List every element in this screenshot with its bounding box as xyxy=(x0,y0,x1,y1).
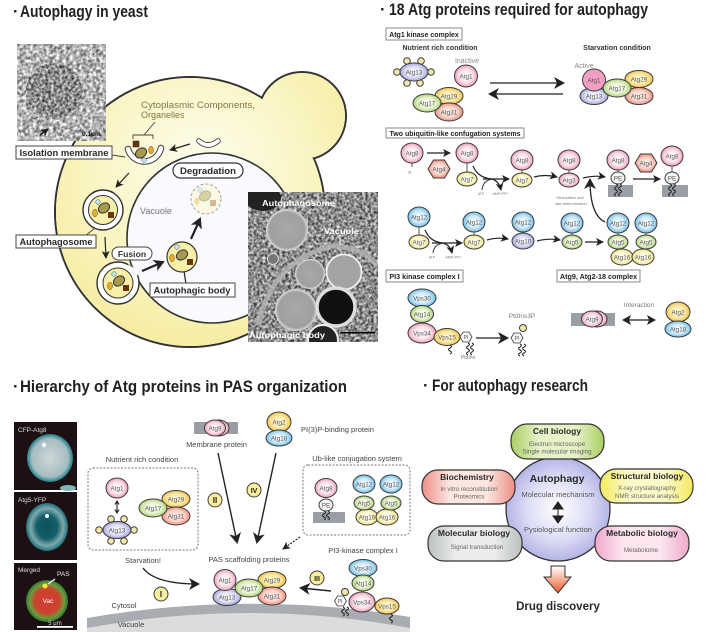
text: Starvation!: Starvation! xyxy=(125,556,161,565)
panel: research fields xyxy=(422,424,693,613)
title: Hierarchy of Atg proteins in PAS organization: Hierarchy of Atg proteins in PAS organization xyxy=(20,378,347,396)
label: PI3 kinase complex I xyxy=(386,270,463,282)
label: Degradation: Degradation xyxy=(180,166,236,176)
dashed box: nutrient rich xyxy=(88,468,198,550)
text: cytoplasmic components: Organelles xyxy=(141,110,185,120)
Atg12 conjugation row: ATP xyxy=(429,256,436,260)
bracket xyxy=(133,122,155,139)
Atg12 conjugation row: Atg5 xyxy=(640,240,653,246)
PAS scaffold complex: Atg17 xyxy=(241,586,258,592)
Atg2 and Atg18 PI3P-binding protein xyxy=(266,412,374,446)
Vps30 Atg14 Vps34 Vps15 stack: PI xyxy=(464,335,468,341)
Atg13 with phosphates: Atg13 xyxy=(406,70,423,76)
heading: starvation condition: Starvation condition xyxy=(583,45,651,52)
pill: Structural biology: NMR structure analysis xyxy=(615,493,679,500)
image: merged: 5 μm xyxy=(48,621,62,627)
thick arrow: fusion to autophagic body xyxy=(142,262,163,271)
title: 18 Atg proteins required for autophagy: · xyxy=(380,1,386,19)
Atg8 conjugation row xyxy=(401,143,688,206)
title: Hierarchy of Atg proteins in PAS organization: · xyxy=(13,378,18,396)
label: Autophagic body: Autophagic body xyxy=(154,286,230,296)
PAS scaffold complex: Atg1 xyxy=(219,578,232,584)
double arrow xyxy=(115,501,119,513)
label: Degradation xyxy=(173,163,243,178)
Atg8 conjugation row: site determination xyxy=(555,201,587,206)
Vps30 Atg14 Vps34 Vps15 stack: PtdIns xyxy=(461,355,476,361)
Atg8-PE: PE xyxy=(322,502,330,510)
label: Fusion: Fusion xyxy=(118,249,146,259)
Atg12 conjugation row: Atg16 xyxy=(635,254,652,262)
Atg12 conjugation row: Atg12 xyxy=(466,220,483,226)
arrow xyxy=(301,588,331,591)
PI3-kinase complex stack: Atg14 xyxy=(355,580,372,588)
electron micrograph: isolation membrane xyxy=(17,44,106,141)
arrow to PAS xyxy=(218,453,237,542)
active complex: Atg29 xyxy=(631,76,648,84)
active complex: Atg13 xyxy=(586,94,603,100)
Atg8 conjugation row: ATP xyxy=(478,192,485,196)
Vps30 Atg14 Vps34 Vps15 stack: Vps15 xyxy=(438,334,456,342)
pill: Cell biology: Cell biology xyxy=(533,426,581,436)
central circle: Autophagy xyxy=(506,457,610,561)
Atg12 conjugation row: Atg16 xyxy=(614,254,631,262)
Atg2 and Atg18: Atg2 xyxy=(672,310,685,316)
Atg1 xyxy=(106,478,128,498)
Vps30 Atg14 Vps34 Vps15 stack xyxy=(408,289,476,361)
Atg13 with phosphates: Atg13 xyxy=(109,528,126,534)
badge I xyxy=(154,587,168,601)
Atg12 conjugation row: Atg7 xyxy=(413,240,426,246)
panel: two ubiquitin-like conjugation systems xyxy=(386,128,688,265)
Atg8 conjugation row: PE xyxy=(668,176,676,182)
badge IV: IV xyxy=(251,488,258,495)
Atg12-Atg5-Atg16: Atg16 xyxy=(379,514,396,522)
active complex: Active xyxy=(574,63,594,70)
pill: Biochemistry: Proteomics xyxy=(454,494,484,500)
badge III xyxy=(310,571,324,585)
arrow xyxy=(476,337,507,339)
thick arrow: to degradation xyxy=(191,219,200,239)
image: Atg5-YFP: Atg5-YFP xyxy=(18,497,46,504)
pill: Structural biology: Structural biology xyxy=(611,471,684,481)
pill: Structural biology xyxy=(600,469,693,503)
feedback arrow xyxy=(590,180,605,222)
vacuole xyxy=(127,153,297,323)
text: cytosol: Cytosol xyxy=(111,601,137,610)
label: Isolation membrane: Isolation membrane xyxy=(20,148,108,158)
active complex: Atg1 xyxy=(588,78,601,84)
text: cytoplasmic components xyxy=(141,100,255,120)
Atg2 and Atg18: Atg18 xyxy=(670,326,687,334)
label: Atg9, Atg2-18 complex: Atg9, Atg2-18 complex xyxy=(560,272,637,281)
arrow to PAS xyxy=(257,453,276,542)
electron micrograph: autophagosome and autophagic bodies: Vacuole xyxy=(324,227,360,236)
Atg1 inactive xyxy=(454,58,479,87)
title: For autophagy research: For autophagy research xyxy=(432,377,588,395)
pill: Biochemistry: In vitro reconstitution xyxy=(440,486,498,493)
label: Isolation membrane xyxy=(16,146,125,159)
Atg12 conjugation row: AMP+PPi xyxy=(445,256,461,260)
electron micrograph: autophagosome and autophagic bodies xyxy=(248,192,378,342)
Atg12 conjugation row: Atg12 xyxy=(638,220,655,228)
Atg9 membrane protein: Membrane protein xyxy=(186,440,247,449)
pill: Biochemistry: Biochemistry xyxy=(440,472,494,482)
PI3-kinase complex stack: PI xyxy=(338,599,342,605)
Atg12 conjugation row: Atg7 xyxy=(468,240,481,246)
pill: Molecular biology: Signal transduction xyxy=(451,544,504,551)
Atg17-29-31: Atg31 xyxy=(168,514,185,520)
panel: PAS organization hierarchy xyxy=(87,412,410,632)
PI3-kinase complex stack: Vps15 xyxy=(378,604,396,610)
image: merged: Vac xyxy=(43,598,54,605)
image: merged xyxy=(14,563,77,630)
active complex: Atg17 xyxy=(609,86,626,92)
heading: nutrient rich condition: Nutrient rich condition xyxy=(402,45,478,52)
Atg8 conjugation row: Atg8 xyxy=(406,150,419,158)
Atg12 conjugation row: Atg12 xyxy=(564,220,581,228)
Atg12-Atg5-Atg16: Atg5 xyxy=(385,500,398,508)
Atg17-29-31: Atg17 xyxy=(145,506,162,512)
Vps30 Atg14 Vps34 Vps15 stack: Vps30 xyxy=(413,296,431,302)
PAS scaffold complex: Atg29 xyxy=(264,578,281,584)
badge III: III xyxy=(314,576,320,583)
Atg8-PE xyxy=(313,478,345,523)
image: merged: Merged xyxy=(18,567,40,574)
degraded cargo xyxy=(191,184,221,214)
pill: Molecular biology xyxy=(428,526,522,561)
pill: Cell biology: Single molecular imaging xyxy=(522,448,592,456)
PtdIns3P xyxy=(509,313,535,356)
curved arrow xyxy=(143,568,198,584)
Atg8 conjugation row: AMP+PPi xyxy=(492,192,508,196)
arrow: down to drug discovery xyxy=(544,566,571,593)
title: Autophagy in yeast: Autophagy in yeast xyxy=(20,3,148,21)
Vps30 Atg14 Vps34 Vps15 stack: Vps34 xyxy=(413,330,431,338)
Atg2 and Atg18 PI3P-binding protein: PI(3)P-binding protein xyxy=(301,425,374,434)
text: cytoplasmic components: Cytoplasmic Components, xyxy=(141,100,255,110)
PAS scaffold complex: Atg13 xyxy=(219,594,236,602)
Atg8 conjugation row: Atg4 xyxy=(640,160,653,168)
Atg12 conjugation row xyxy=(408,207,657,265)
image: CFP-Atg8: CFP-Atg8 xyxy=(18,427,47,434)
electron micrograph: autophagosome and autophagic bodies: Autophagic body xyxy=(249,331,326,340)
pill: Molecular biology: Molecular biology xyxy=(438,528,510,538)
Atg12-Atg5-Atg16: Atg12 xyxy=(383,482,400,488)
badge II: II xyxy=(213,496,217,505)
heading: Ub-like conjugation system: Ub-like conjugation system xyxy=(312,454,402,463)
interaction double arrow: Interaction xyxy=(624,302,655,309)
panel: Atg1 kinase complex xyxy=(386,28,653,121)
Atg8 conjugation row: PE xyxy=(614,176,622,182)
equilibrium arrows xyxy=(490,83,563,94)
PI3-kinase complex stack: Vps34 xyxy=(353,600,371,606)
yeast cell with bud xyxy=(55,72,346,347)
Atg8 conjugation row: Atg7 xyxy=(516,178,529,184)
label: Atg1 kinase complex xyxy=(386,28,462,40)
Atg1 inactive: Inactive xyxy=(455,58,479,65)
text: Vacuole: Vacuole xyxy=(140,206,172,216)
pill: Metabolic biology: Metabolome xyxy=(624,547,659,554)
panel: fluorescence micrographs xyxy=(14,422,77,630)
pill: Biochemistry xyxy=(422,470,515,504)
heading: nutrient rich condition: Nutrient rich condition xyxy=(106,455,178,464)
Atg12-Atg5-Atg16: Atg5 xyxy=(358,500,371,508)
pill: Structural biology: X-ray crystallography xyxy=(618,485,677,492)
autophagic body xyxy=(167,242,197,284)
pill: Metabolic biology xyxy=(595,526,689,561)
Atg8 conjugation row: Atg8 xyxy=(516,158,529,164)
Atg12 conjugation row: Atg10 xyxy=(515,238,532,246)
central circle: Autophagy: Autophagy xyxy=(530,473,585,485)
label: Autophagosome xyxy=(16,228,96,248)
PI3-kinase complex stack xyxy=(334,560,399,623)
label: Autophagosome: Autophagosome xyxy=(20,237,92,247)
Atg12-Atg5-Atg16 xyxy=(353,475,402,525)
Atg17-29-31: Atg29 xyxy=(441,94,458,100)
badge IV xyxy=(247,483,261,497)
pill: Cell biology: Electron microscope xyxy=(529,441,586,448)
label: Fusion xyxy=(112,247,152,260)
PAS scaffold complex xyxy=(213,570,286,606)
Atg12-Atg5-Atg16: Atg12 xyxy=(356,482,373,488)
Atg1 inactive: Atg1 xyxy=(460,74,473,80)
Atg2 and Atg18 PI3P-binding protein: Atg18 xyxy=(271,436,288,442)
text: vacuole: Vacuole xyxy=(118,620,144,629)
membrane band: cytosol and vacuole xyxy=(87,604,410,632)
Atg2 and Atg18 xyxy=(665,302,691,337)
panel: Atg9, Atg2-18 complex xyxy=(557,270,691,337)
badge I: I xyxy=(160,590,162,599)
PtdIns3P: PI xyxy=(515,336,519,342)
image: CFP-Atg8 xyxy=(14,422,77,491)
Atg9 membrane protein xyxy=(186,420,247,449)
PI3-kinase complex stack: Vps30 xyxy=(354,566,372,572)
label: two ubiquitin-like conjugation systems: Two ubiquitin-like confugation systems xyxy=(390,131,521,138)
active complex: Atg31 xyxy=(631,94,648,100)
Atg8 conjugation row: Atg7 xyxy=(461,176,474,184)
Vps30 Atg14 Vps34 Vps15 stack: Atg14 xyxy=(414,312,431,318)
active complex xyxy=(574,63,653,104)
panel: PI3 kinase complex I xyxy=(386,270,535,361)
Atg8 conjugation row: R xyxy=(408,170,412,175)
Atg17-29-31: Atg29 xyxy=(168,496,185,504)
image: merged: PAS xyxy=(57,571,70,578)
arrow xyxy=(105,237,106,258)
Atg8 conjugation row: Atg4 xyxy=(433,166,446,174)
dashed box: Ub-like conjugation xyxy=(303,465,410,535)
Atg8 conjugation row: Stimulation and xyxy=(556,195,584,200)
autophagosome xyxy=(83,190,123,230)
Atg12-Atg5-Atg16: Atg16 xyxy=(359,514,376,522)
Atg17-29-31: Atg31 xyxy=(441,110,458,116)
label: two ubiquitin-like conjugation systems xyxy=(386,128,524,138)
heading: PAS scaffolding proteins: PAS scaffolding proteins xyxy=(208,555,290,564)
isolation membrane cup with cargo xyxy=(128,141,161,162)
central circle: Autophagy: Pysiological function xyxy=(524,525,592,534)
image: Atg5-YFP xyxy=(14,492,77,560)
label: Atg1 kinase complex: Atg1 kinase complex xyxy=(389,32,459,39)
panel: autophagy in yeast diagram xyxy=(16,44,378,355)
Atg13 with phosphates xyxy=(96,516,137,544)
Atg2 and Atg18 PI3P-binding protein: Atg2 xyxy=(273,420,286,426)
Atg13 with phosphates xyxy=(394,58,434,86)
label: PI3 kinase complex I: PI3 kinase complex I xyxy=(389,272,460,281)
central circle: Autophagy: Molecular mechanism xyxy=(522,490,594,499)
Atg17-29-31 xyxy=(413,88,463,121)
electron micrograph: isolation membrane: 0.1μm xyxy=(82,131,101,138)
Atg1: Atg1 xyxy=(111,486,124,492)
arrow xyxy=(116,173,129,187)
arrow xyxy=(170,144,190,150)
title: For autophagy research: · xyxy=(423,377,428,395)
Atg17-29-31: Atg17 xyxy=(419,100,436,108)
pill: Metabolic biology: Metabolic biology xyxy=(606,528,678,538)
label: Autophagic body xyxy=(150,283,235,297)
Atg8 conjugation row: Atg8 xyxy=(612,158,625,164)
Atg8 conjugation row: Atg8 xyxy=(666,154,679,160)
Atg8 conjugation row: Atg3 xyxy=(563,178,576,184)
dashed arrow xyxy=(283,537,300,549)
Atg9 in membrane: Atg9 xyxy=(586,316,599,324)
small membrane crescent xyxy=(199,141,218,145)
fusing autophagosome xyxy=(97,262,139,304)
PtdIns3P: PtdIns3P xyxy=(509,313,535,320)
Atg17-29-31 xyxy=(139,490,190,525)
pill: Cell biology xyxy=(511,424,604,459)
title: 18 Atg proteins required for autophagy: 18 Atg proteins required for autophagy xyxy=(389,1,649,19)
Atg12 conjugation row: Atg12 xyxy=(515,220,532,226)
Atg9 membrane protein: Atg9 xyxy=(209,426,222,432)
heading: PI3-kinase complex I: PI3-kinase complex I xyxy=(328,546,398,555)
Atg12 conjugation row: Atg5 xyxy=(612,240,625,246)
Atg8-PE: Atg8 xyxy=(320,486,333,492)
PAS scaffold complex: Atg31 xyxy=(264,594,281,600)
Atg12 conjugation row: Atg12 xyxy=(610,220,627,228)
Atg12 conjugation row: Atg5 xyxy=(566,240,579,246)
text: Drug discovery: Drug discovery xyxy=(516,601,600,613)
Atg8 conjugation row: Atg8 xyxy=(461,150,474,158)
electron micrograph: autophagosome and autophagic bodies: Autophagosome xyxy=(262,199,336,208)
Atg12 conjugation row: Atg12 xyxy=(411,214,428,222)
Atg8 conjugation row: Atg8 xyxy=(563,158,576,164)
badge II xyxy=(208,493,222,507)
title: Autophagy in yeast: · xyxy=(13,3,18,21)
